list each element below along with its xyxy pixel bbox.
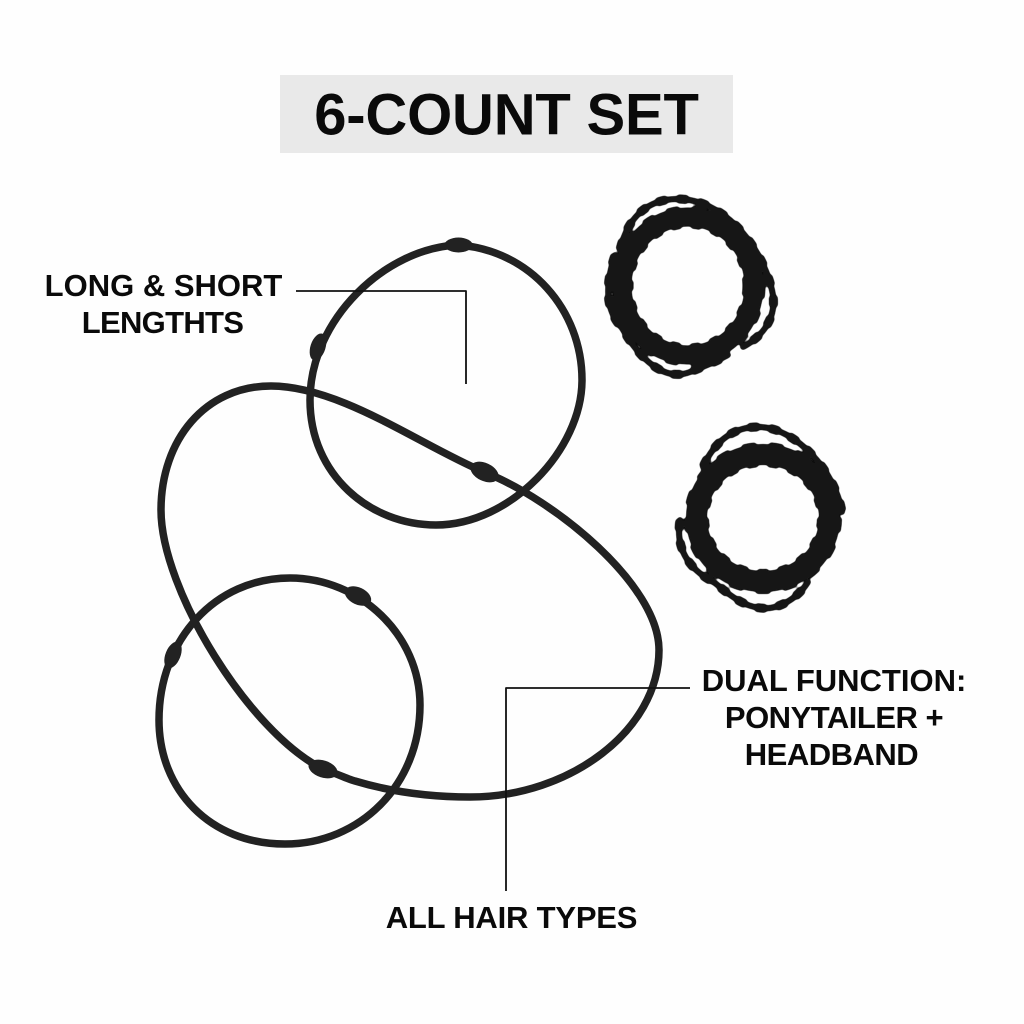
- label: long and short lengths: [45, 268, 282, 340]
- leader line: lengths: [296, 291, 466, 384]
- coiled ties: top right: [608, 199, 773, 374]
- label: dual function: [702, 663, 966, 772]
- label: all hair types: ALL HAIR TYPES: [386, 900, 637, 935]
- long band: top loop: [307, 238, 582, 525]
- short band: bottom loop: [159, 578, 420, 844]
- label: dual function: PONYTAILER +: [725, 700, 943, 735]
- coiled ties: lower right: [679, 427, 842, 608]
- title banner: 6-COUNT SET: [314, 82, 699, 148]
- label: dual function: HEADBAND: [745, 737, 918, 772]
- label: dual function: DUAL FUNCTION:: [702, 663, 966, 698]
- long band: large loop: [161, 386, 659, 797]
- label: long and short lengths: LONG & SHORT: [45, 268, 282, 303]
- leader line: dual function and hair types: [506, 688, 690, 891]
- label: long and short lengths: LENGTHTS: [82, 305, 243, 340]
